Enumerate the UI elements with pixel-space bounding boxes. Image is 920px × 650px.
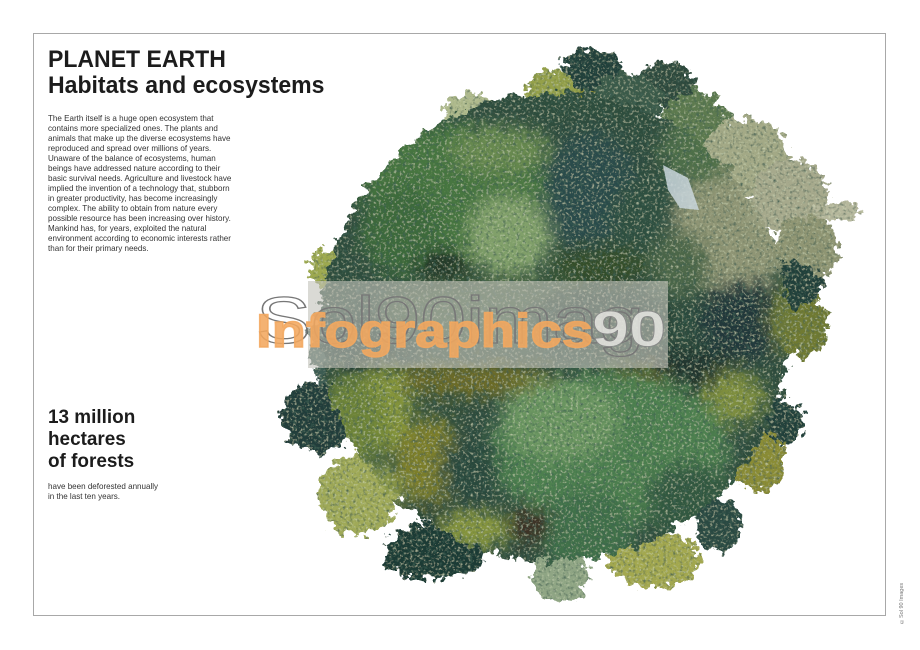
watermark: 90: 90 bbox=[592, 301, 666, 357]
statistic note: in the last ten years. bbox=[48, 491, 120, 501]
watermark: Infographics: Infographics bbox=[256, 304, 593, 357]
statistic heading: of forests bbox=[48, 450, 134, 472]
image credit: ©Sol 90 Images bbox=[899, 583, 905, 624]
icon: patch of ice bbox=[663, 165, 699, 210]
intro text: contains more specialized ones. The plants and bbox=[48, 123, 218, 133]
planet body bbox=[321, 93, 789, 561]
intro text: animals that make up the diverse ecosystems have bbox=[48, 133, 231, 143]
planet of forests bbox=[282, 48, 860, 603]
intro text: possible resource has been increasing over history. bbox=[48, 213, 231, 223]
intro text: than for their primary needs. bbox=[48, 243, 149, 253]
forest: upper right pale olive bbox=[675, 155, 795, 295]
intro text: in greater productivity, has become increasingly bbox=[48, 193, 217, 203]
statistic note: have been deforested annually bbox=[48, 481, 158, 491]
watermark panel bbox=[308, 281, 668, 368]
intro text: complex. The ability to obtain from nature every bbox=[48, 203, 217, 213]
title bbox=[48, 46, 324, 99]
watermark bbox=[256, 281, 668, 368]
title: Habitats and ecosystems bbox=[48, 72, 324, 99]
title: PLANET EARTH bbox=[48, 46, 226, 73]
intro text: implied the invention of a technology that, stubborn bbox=[48, 183, 230, 193]
forest: bottom green bbox=[490, 372, 730, 528]
statistic heading: hectares bbox=[48, 428, 126, 450]
intro text: basic survival needs. Agriculture and livestock have bbox=[48, 173, 231, 183]
watermark: Sol90images outline: Sol90imag bbox=[256, 283, 644, 357]
forest: top dark blue-green bbox=[542, 133, 638, 257]
statistic heading bbox=[48, 406, 135, 472]
intro text: Mankind has, for years, exploited the natural bbox=[48, 223, 206, 233]
intro text: reproduced and spread over millions of years. bbox=[48, 143, 211, 153]
forest: lower left olive bbox=[348, 368, 412, 452]
intro text bbox=[48, 113, 231, 253]
forest: middle band bbox=[346, 368, 390, 376]
statistic note bbox=[48, 481, 158, 501]
intro text: Unaware of the balance of ecosystems, human bbox=[48, 153, 216, 163]
statistic heading: 13 million bbox=[48, 406, 135, 428]
intro text: environment according to economic interests rather bbox=[48, 233, 231, 243]
outer tree clumps bbox=[282, 48, 860, 603]
intro text: beings have addressed nature according to their bbox=[48, 163, 220, 173]
forest: upper left green bbox=[363, 123, 547, 267]
forest: right dark bbox=[699, 280, 791, 360]
intro text: The Earth itself is a huge open ecosystem that bbox=[48, 113, 214, 123]
